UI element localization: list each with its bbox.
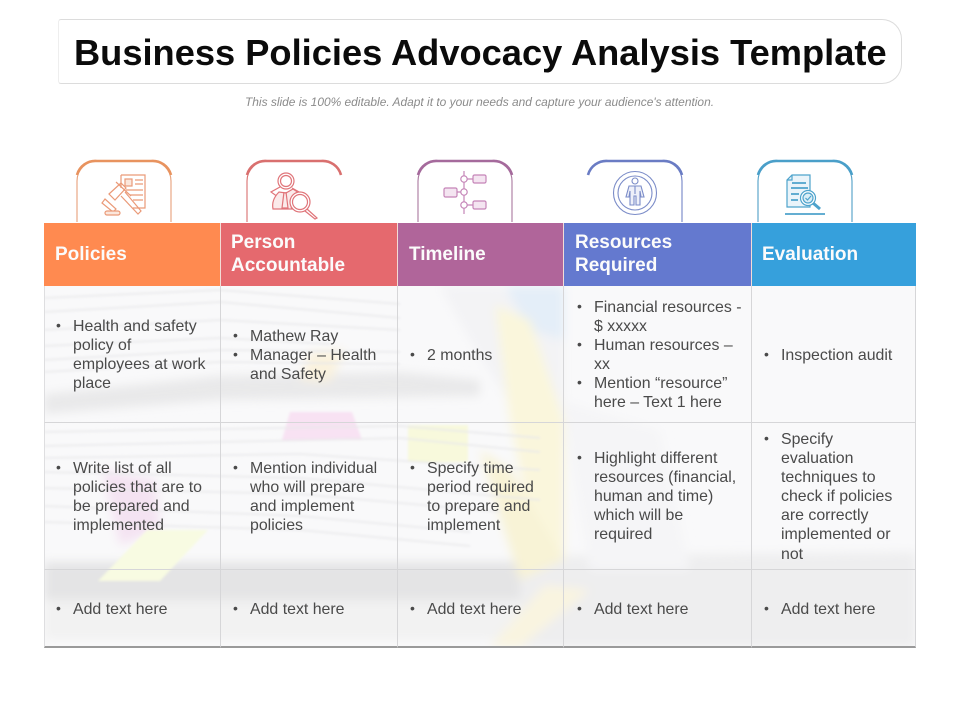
row 2, policies: [44, 423, 221, 570]
row 1, resources required: [564, 286, 752, 423]
row 1, resources required: xx: [594, 356, 610, 373]
row 2, evaluation: check if policies: [781, 488, 892, 505]
row 1, timeline: 2 months: [427, 347, 492, 364]
row 3, resources required: [564, 570, 752, 648]
row 3, person accountable: [221, 570, 398, 648]
row 2, policies: policies that are to: [73, 479, 202, 496]
row 1, resources required: Mention “resource”: [594, 375, 727, 392]
icon: gavel and document: [101, 174, 146, 216]
row 1, policies: Health and safety: [73, 318, 197, 335]
icon tab: person accountable: [246, 160, 342, 222]
row 2, policies: implemented: [73, 517, 164, 534]
row 1, person accountable: [221, 286, 398, 423]
header: timeline: [398, 223, 564, 286]
row 2, evaluation: are correctly: [781, 507, 868, 524]
row 3, policies: [44, 570, 221, 648]
table background photo: faded stack of papers: [45, 286, 915, 646]
row 2, policies: be prepared and: [73, 498, 190, 515]
row 1, person accountable: Manager – Health: [250, 347, 376, 364]
row 2, person accountable: [221, 423, 398, 570]
row 1, evaluation: Inspection audit: [781, 347, 892, 364]
header: evaluation: [752, 223, 916, 286]
row 3, timeline: Add text here: [427, 601, 522, 618]
row 3, timeline: [398, 570, 564, 648]
row 2, timeline: to prepare and: [427, 498, 530, 515]
row 1, resources required: here – Text 1 here: [594, 394, 722, 411]
row 2, person accountable: policies: [250, 517, 303, 534]
header: timeline: Timeline: [409, 244, 486, 264]
row 2, person accountable: and implement: [250, 498, 354, 515]
icon tab: resources required: [586, 160, 684, 222]
row 1, person accountable: and Safety: [250, 366, 326, 383]
header: resources required: [564, 223, 752, 286]
row 2, evaluation: techniques to: [781, 469, 876, 486]
row 2, evaluation: Specify: [781, 431, 833, 448]
row 1, policies: [44, 286, 221, 423]
row 3, person accountable: Add text here: [250, 601, 345, 618]
row 2, resources required: human and time): [594, 488, 713, 505]
row 1, policies: employees at work: [73, 356, 205, 373]
header: person accountable: Accountable: [231, 255, 345, 276]
row 3, evaluation: [752, 570, 916, 648]
title box: [58, 19, 902, 84]
row 1, resources required: $ xxxxx: [594, 318, 647, 335]
icon tab: policies: [76, 160, 172, 222]
header: person accountable: [221, 223, 398, 286]
header: person accountable: Person: [231, 232, 295, 253]
row 2, evaluation: implemented or: [781, 526, 891, 543]
row 3, resources required: Add text here: [594, 601, 689, 618]
row 2, resources required: required: [594, 526, 652, 543]
header: resources required: Required: [575, 255, 657, 276]
row 2, timeline: period required: [427, 479, 534, 496]
row 1, person accountable: Mathew Ray: [250, 328, 338, 345]
row 2, timeline: [398, 423, 564, 570]
row 1, policies: place: [73, 375, 111, 392]
row 2, resources required: Highlight different: [594, 450, 717, 467]
header: evaluation: Evaluation: [762, 244, 858, 264]
row 2, timeline: implement: [427, 517, 500, 534]
row 2, resources required: [564, 423, 752, 570]
row 2, policies: Write list of all: [73, 460, 172, 477]
row 2, resources required: resources (financial,: [594, 469, 736, 486]
row 1, evaluation: [752, 286, 916, 423]
row 2, person accountable: who will prepare: [250, 479, 365, 496]
row 2, timeline: Specify time: [427, 460, 514, 477]
row 3, evaluation: Add text here: [781, 601, 876, 618]
row 1, resources required: Financial resources -: [594, 299, 742, 316]
row 2, evaluation: evaluation: [781, 450, 853, 467]
row 2, evaluation: [752, 423, 916, 570]
icon tab: timeline: [416, 160, 514, 222]
icon: person with magnifier: [270, 172, 318, 220]
icon: timeline nodes: [443, 171, 487, 214]
header: resources required: Resources: [575, 232, 672, 253]
row 1, policies: policy of: [73, 337, 131, 354]
icon tab: evaluation: [756, 160, 854, 222]
row 3, policies: Add text here: [73, 601, 168, 618]
icon: audit document with magnifier: [785, 174, 825, 215]
icon: person in circle: [612, 171, 657, 215]
row 2, resources required: which will be: [594, 507, 683, 524]
subtitle: This slide is 100% editable. Adapt it to your needs and capture your audience's attention.: [245, 95, 714, 109]
row 1, timeline: [398, 286, 564, 423]
header: policies: [44, 223, 221, 286]
row 2, person accountable: Mention individual: [250, 460, 377, 477]
header: policies: Policies: [55, 244, 127, 264]
row 2, evaluation: not: [781, 546, 803, 563]
row 1, resources required: Human resources –: [594, 337, 733, 354]
title: Business Policies Advocacy Analysis Template: [74, 32, 887, 73]
